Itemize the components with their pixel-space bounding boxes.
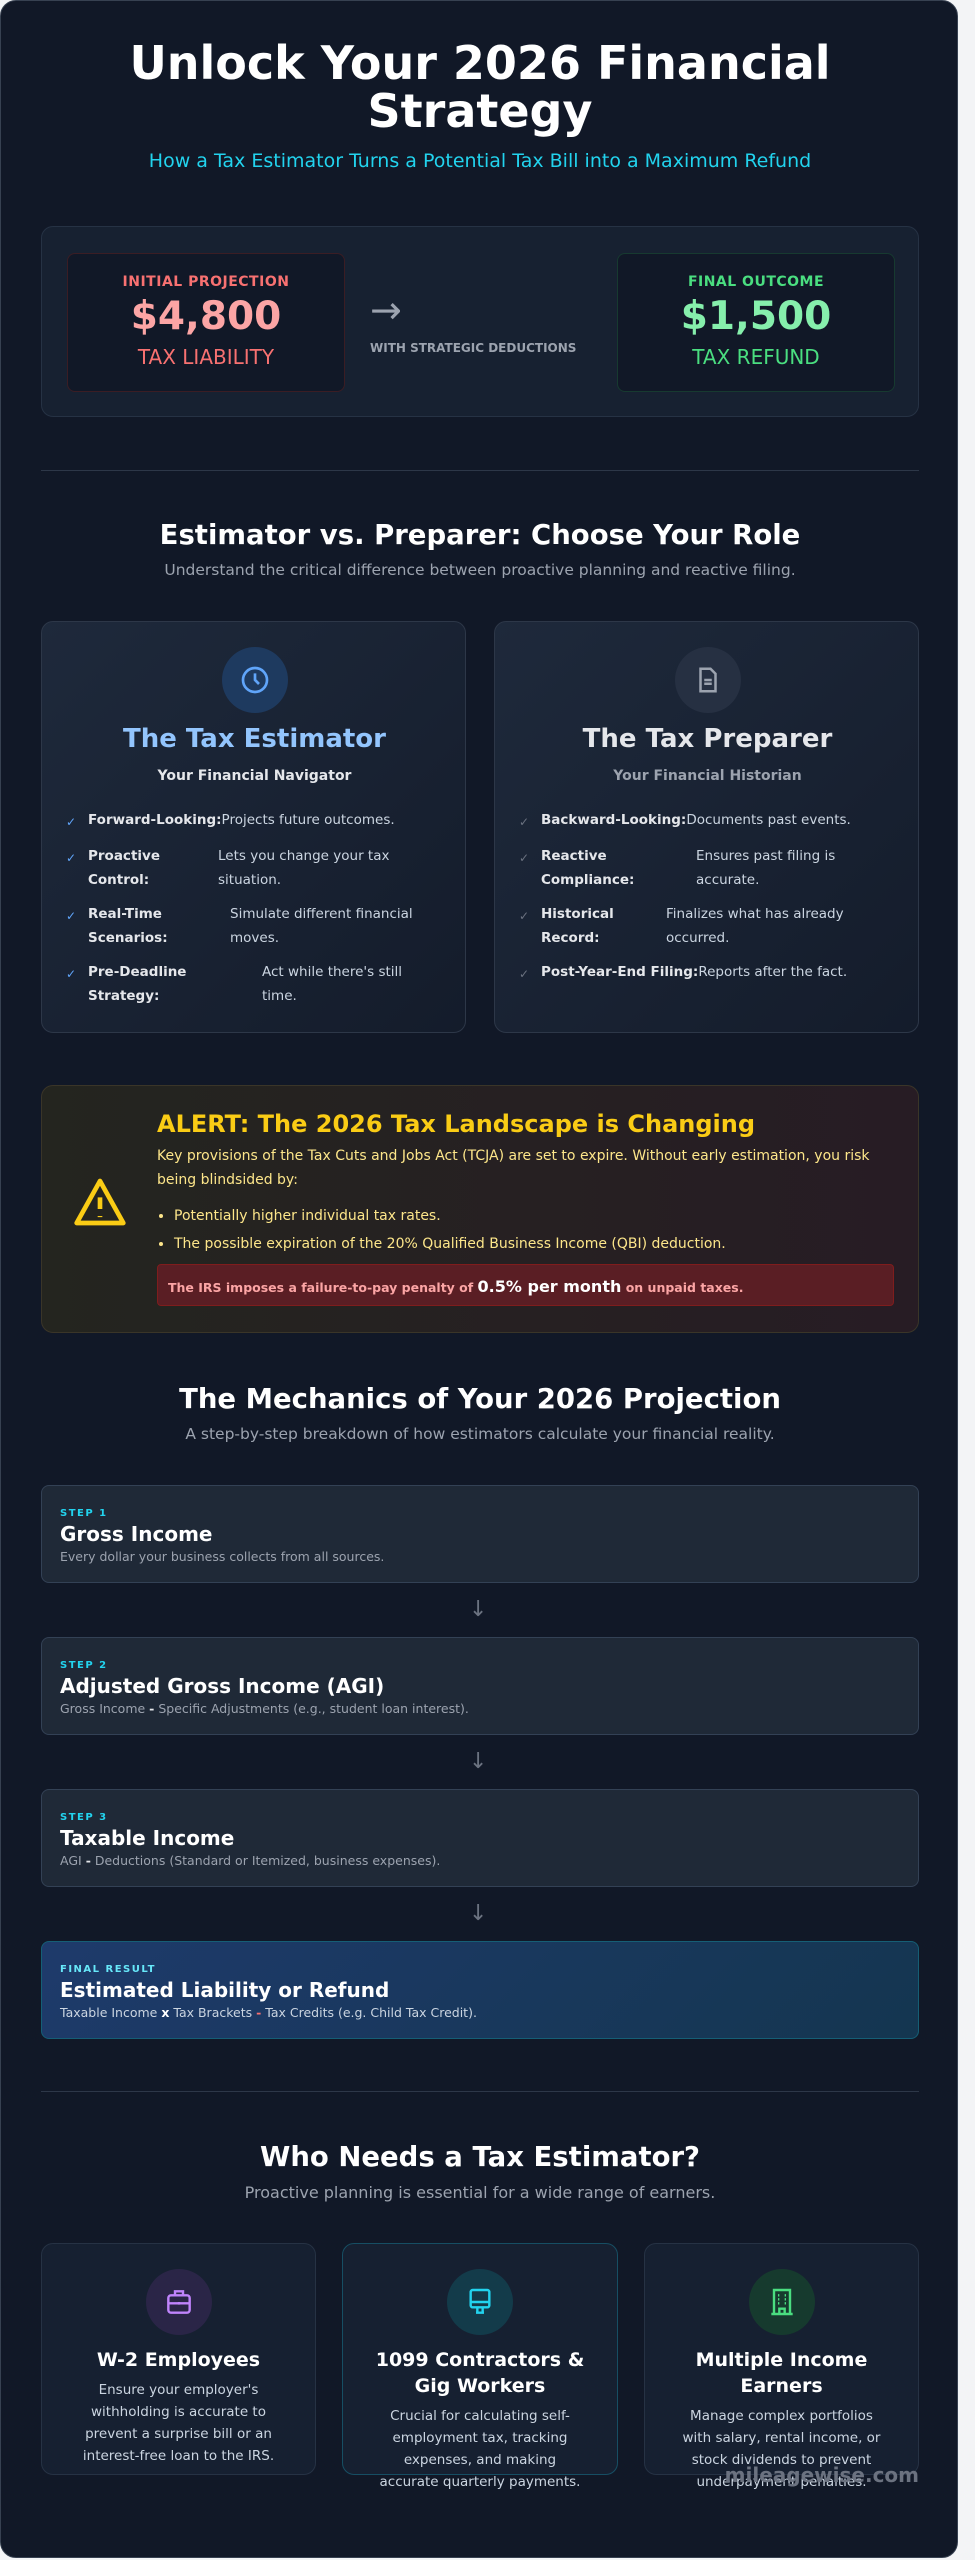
list: preparer traits: Finalizes what has already occurred. [666,906,844,946]
card: 1099: Gig Workers [415,2375,545,2397]
step 3: Taxable Income [60,1826,234,1850]
step 2 [41,1637,919,1735]
list: estimator traits: Pre-Deadline [88,964,186,980]
subheading: A step-by-step breakdown of how estimators calculate your financial reality. [185,1425,775,1443]
alert heading: ALERT: The 2026 Tax Landscape is Changing [157,1110,755,1138]
initial projection box [67,253,345,392]
title: Unlock Your 2026 Financial Strategy [129,36,831,138]
heading: estimator vs preparer: Estimator vs. Preparer: Choose Your Role [160,519,800,551]
list: estimator traits: Forward-Looking: [88,812,222,828]
card: 1099: Crucial for calculating self-employment tax, tracking expenses, and making [390,2408,570,2468]
panel: tax estimator [41,621,466,1033]
icon: computer [447,2269,513,2335]
heading: who needs: Who Needs a Tax Estimator? [260,2141,700,2173]
step 3 [41,1789,919,1887]
step 1: Every dollar your business collects from all sources. [60,1549,384,1564]
final result: FINAL RESULT [60,1964,156,1975]
list: estimator traits: Lets you change your tax situation. [218,848,389,888]
card: W-2: W-2 Employees [97,2349,260,2371]
step 1 [41,1485,919,1583]
step 2: Gross Income - Specific Adjustments (e.g., student loan interest). [60,1701,469,1716]
panel: hero comparison [41,226,919,417]
arrow: ↓ [469,1901,487,1926]
panel: tax estimator: Your Financial Navigator [158,768,351,784]
watermark: mileagewise.com [725,2463,919,2487]
final outcome box [617,253,895,392]
penalty callout [157,1264,894,1306]
card: W-2 [41,2243,316,2475]
text: accurate quarterly payments. [380,2474,580,2490]
alert bullets: The possible expiration of the 20% Qualified Business Income (QBI) deduction. [174,1236,726,1252]
subheading: Understand the critical difference between proactive planning and reactive filing. [164,561,796,579]
list: preparer traits: Reports after the fact. [698,964,847,980]
list: estimator traits: Proactive Control: [88,848,160,888]
list: estimator traits: ✓ [66,815,76,829]
panel: alert [41,1085,919,1333]
final outcome box: FINAL OUTCOME [688,274,824,290]
arrow: strategic deductions [370,288,576,355]
arrow: ↓ [469,1597,487,1622]
list: estimator traits: ✓ [66,909,76,923]
list: preparer traits: ✓ [519,815,529,829]
arrow: strategic deductions: → [370,288,402,332]
card: 1099 [342,2243,618,2475]
final result: Taxable Income x Tax Brackets - Tax Credits (e.g. Child Tax Credit). [60,2005,477,2020]
alert bullets [159,1208,726,1252]
card: W-2: Ensure your employer's withholding is accurate to prevent a surprise bill or an interest-free loan to the IRS. [83,2382,274,2464]
icon: briefcase [146,2269,212,2335]
icon: building [748,2269,814,2335]
card: multiple income: Multiple Income [696,2349,867,2371]
step 2: STEP 2 [60,1660,108,1671]
card: multiple income [644,2243,919,2475]
panel: tax preparer [494,621,919,1033]
subtitle: How a Tax Estimator Turns a Potential Tax Bill into a Maximum Refund [149,150,811,172]
list: preparer traits: Documents past events. [686,812,851,828]
penalty callout: The IRS imposes a failure-to-pay penalty of 0.5% per month on unpaid taxes. [168,1277,743,1296]
heading: The Tax Estimator [123,724,386,754]
heading: The Tax Preparer [583,724,832,754]
step 3: AGI - Deductions (Standard or Itemized, business expenses). [60,1853,440,1868]
alert text: Key provisions of the Tax Cuts and Jobs Act (TCJA) are set to expire. Without early estimation, you risk being blindsided by: [157,1148,870,1188]
icon: clock [222,647,288,713]
list: estimator traits: Act while there's still time. [262,964,402,1004]
initial projection box: TAX LIABILITY [138,345,274,369]
list: preparer traits: ✓ [519,909,529,923]
initial projection box: $4,800 [131,294,281,339]
list: preparer traits: Post-Year-End Filing: [541,964,698,980]
icon: document [675,647,741,713]
arrow: strategic deductions: WITH STRATEGIC DEDUCTIONS [370,341,576,355]
list: preparer traits: Ensures past filing is accurate. [696,848,835,888]
icon: warning [74,1178,126,1226]
list: preparer traits: Reactive Compliance: [541,848,634,888]
list: estimator traits: Projects future outcomes. [222,812,395,828]
list: estimator traits: Strategy: [88,988,159,1004]
final result: Estimated Liability or Refund [60,1978,389,2002]
list: preparer traits: Backward-Looking: [541,812,686,828]
subheading: Proactive planning is essential for a wide range of earners. [245,2183,715,2202]
list: preparer traits: Historical Record: [541,906,614,946]
step 1: Gross Income [60,1522,212,1546]
list: preparer traits: ✓ [519,967,529,981]
list: estimator traits: ✓ [66,851,76,865]
final result [41,1941,919,2039]
step 2: Adjusted Gross Income (AGI) [60,1674,384,1698]
initial projection box: INITIAL PROJECTION [123,274,289,290]
alert bullets: Potentially higher individual tax rates. [174,1208,441,1224]
list: estimator traits: Simulate different financial moves. [230,906,413,946]
step 1: STEP 1 [60,1508,108,1519]
final outcome box: $1,500 [681,294,831,339]
step 3: STEP 3 [60,1812,108,1823]
list: estimator traits: ✓ [66,967,76,981]
final outcome box: TAX REFUND [692,345,820,369]
card: 1099: 1099 Contractors & [376,2349,584,2371]
panel: tax preparer: Your Financial Historian [613,768,802,784]
list: preparer traits [519,812,851,981]
card: multiple income: Earners [740,2375,823,2397]
arrow: ↓ [469,1749,487,1774]
list: estimator traits: Real-Time Scenarios: [88,906,168,946]
card: multiple income: Manage complex portfolios with salary, rental income, or stock dividends to prevent underpayment penalties. [683,2408,880,2490]
list: estimator traits [66,812,413,1004]
list: preparer traits: ✓ [519,851,529,865]
heading: mechanics: The Mechanics of Your 2026 Projection [179,1383,781,1415]
